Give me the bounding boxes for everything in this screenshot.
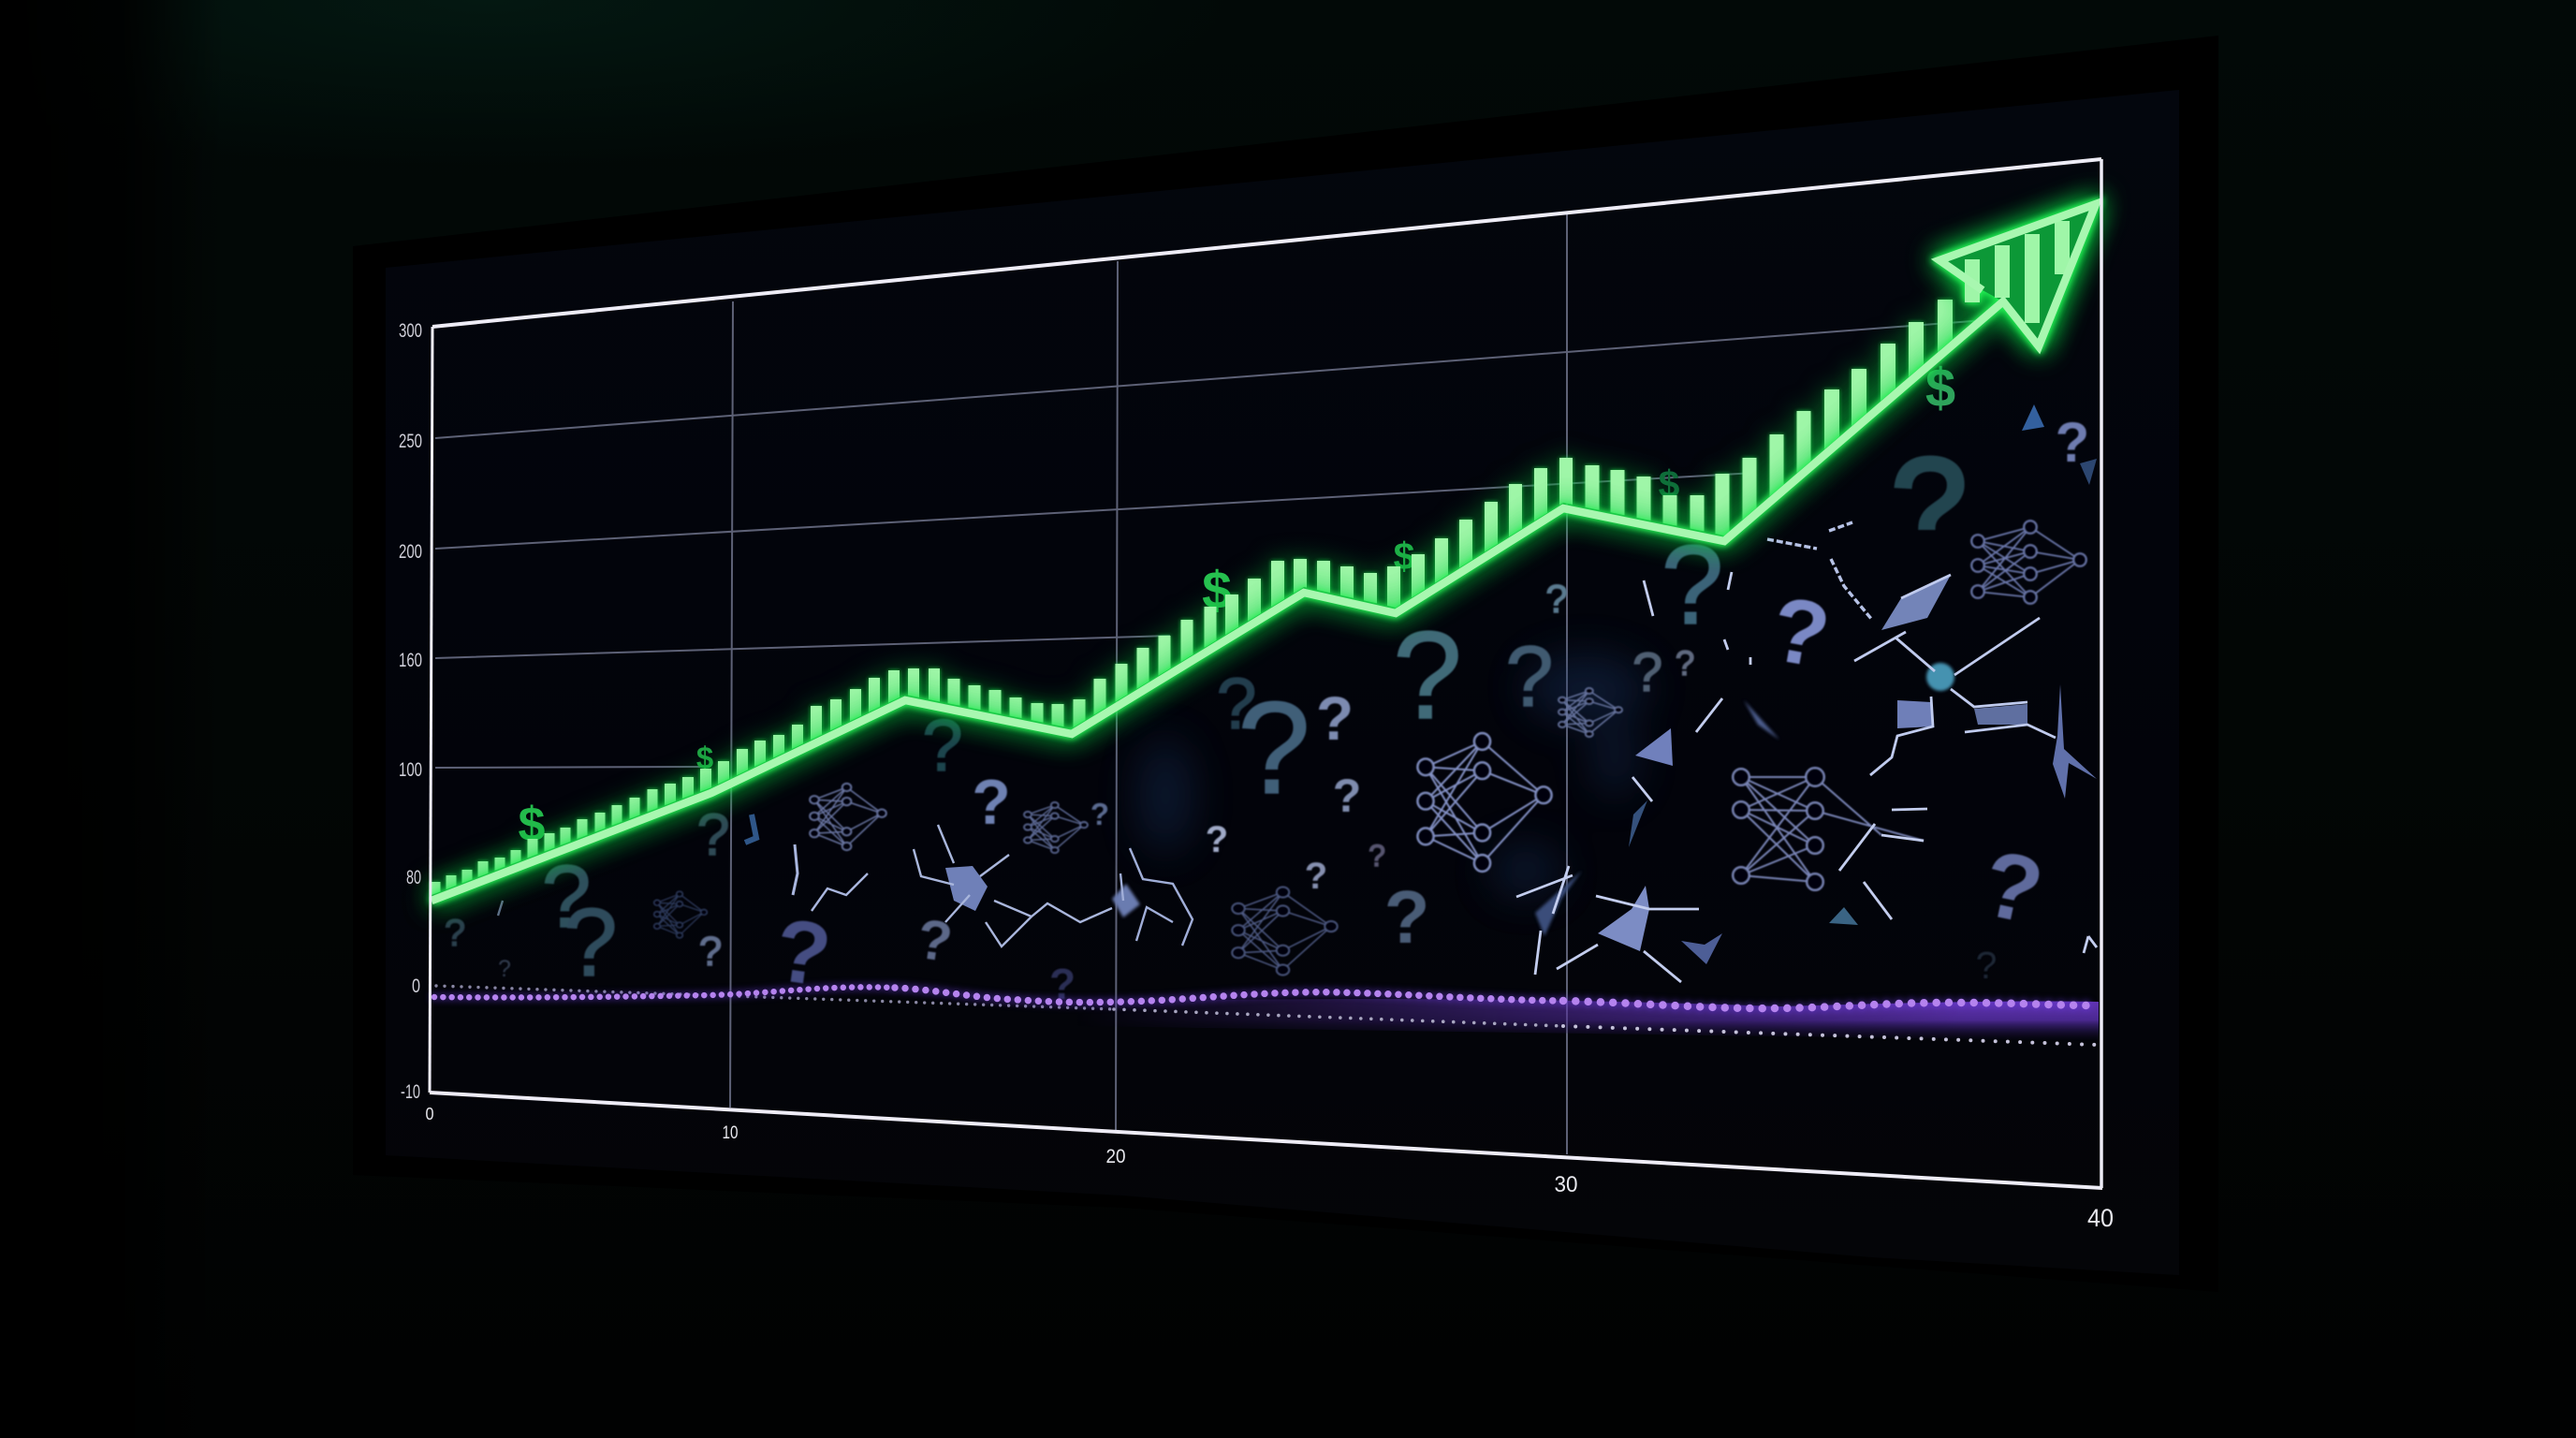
icon: neural network faint far left: [653, 891, 708, 938]
x axis labels: 40: [2087, 1204, 2114, 1232]
question marks: ?: [1217, 664, 1256, 744]
question marks: ?: [699, 929, 722, 975]
grey dotted baseline: [436, 986, 2097, 1045]
question marks: ?: [1976, 944, 1997, 987]
question marks: ?: [1974, 830, 2052, 945]
question marks: ?: [1206, 819, 1228, 860]
y axis labels: 80: [406, 867, 421, 888]
icon: neural network centre: [1417, 733, 1552, 872]
icon: neural network right, large: [1733, 768, 1924, 890]
question marks: ?: [498, 956, 511, 982]
question marks: ?: [922, 704, 963, 786]
plot frame: [430, 159, 2102, 1188]
dollar signs: $: [696, 741, 713, 775]
screen outer black frame: [353, 36, 2218, 1292]
neuron left with body: [914, 825, 1112, 946]
neural fragments left: [496, 814, 869, 916]
question marks: ?: [1305, 856, 1327, 897]
dollar signs: $: [1202, 561, 1232, 621]
question marks: ?: [769, 900, 837, 1006]
question marks: ?: [1892, 431, 1967, 581]
icon: neural network upper right: [1971, 521, 2086, 604]
y axis labels: 250: [399, 431, 422, 452]
question marks: ?: [564, 888, 618, 996]
x axis labels: 0: [425, 1105, 434, 1123]
question marks: ?: [1333, 770, 1361, 822]
chart: [399, 159, 2114, 1232]
question marks: ?: [972, 767, 1011, 838]
x axis labels: [425, 1105, 2114, 1232]
green bars: [435, 300, 1945, 976]
y axis labels: 0: [412, 976, 420, 997]
question marks: ?: [2056, 411, 2089, 474]
dollar signs: $: [1659, 462, 1680, 506]
arrow interior tint: [1939, 204, 2096, 346]
rising green trend line: [432, 204, 2096, 901]
y axis labels: 160: [399, 650, 422, 671]
question marks: ?: [914, 907, 956, 974]
fractured neuron shapes: [498, 404, 2097, 982]
arrow head: [432, 204, 2096, 901]
question marks: ?: [542, 847, 591, 946]
dollar signs: $: [519, 798, 546, 852]
question marks: ?: [445, 913, 465, 954]
question marks: ?: [1368, 839, 1385, 873]
neural network icons: [653, 521, 2086, 976]
question marks: ?: [696, 802, 730, 868]
dollar signs: $: [1394, 535, 1415, 578]
grid lines: [435, 213, 1984, 1154]
atmosphere: blue nebula behind the neural fragments: [1139, 655, 1647, 895]
y axis labels: 300: [399, 320, 422, 342]
neuron right large with blue core: [1767, 522, 2097, 799]
purple dotted line: [434, 987, 2095, 1008]
question marks: ?: [1237, 674, 1310, 821]
question marks: ?: [1316, 683, 1354, 753]
neuron second with glow: [1112, 848, 1193, 946]
icon: neural network tangled: [1024, 802, 1088, 853]
question marks: ?: [1764, 577, 1837, 687]
dollar signs: $: [1925, 358, 1955, 418]
bars inside arrow: [1972, 221, 2062, 323]
x axis labels: 10: [723, 1123, 738, 1143]
icon: neural network small, centre top: [1559, 688, 1622, 737]
question marks: ?: [1676, 644, 1694, 682]
question marks: [445, 411, 2089, 1008]
x axis labels: 20: [1106, 1146, 1125, 1167]
dollar signs: [519, 358, 1955, 852]
y axis labels: -10: [401, 1081, 420, 1103]
question marks: ?: [1661, 522, 1723, 648]
question marks: ?: [1049, 960, 1076, 1008]
question marks: ?: [1384, 875, 1429, 959]
question marks: ?: [1505, 629, 1554, 725]
icon: neural network lower centre: [1232, 887, 1338, 976]
icon: neural network left: [810, 784, 886, 850]
x axis labels: 30: [1554, 1172, 1578, 1197]
question marks: ?: [1545, 577, 1568, 621]
y axis labels: 200: [399, 541, 422, 563]
question marks: ?: [1090, 797, 1109, 831]
question marks: ?: [1632, 642, 1662, 703]
scattered shards and dashes: [1516, 404, 2097, 982]
purple band under the flat line: [1125, 999, 2099, 1038]
y axis labels: [399, 320, 422, 1103]
screen surface: [386, 90, 2179, 1275]
y axis labels: 100: [399, 759, 422, 781]
question marks: ?: [1393, 607, 1462, 745]
